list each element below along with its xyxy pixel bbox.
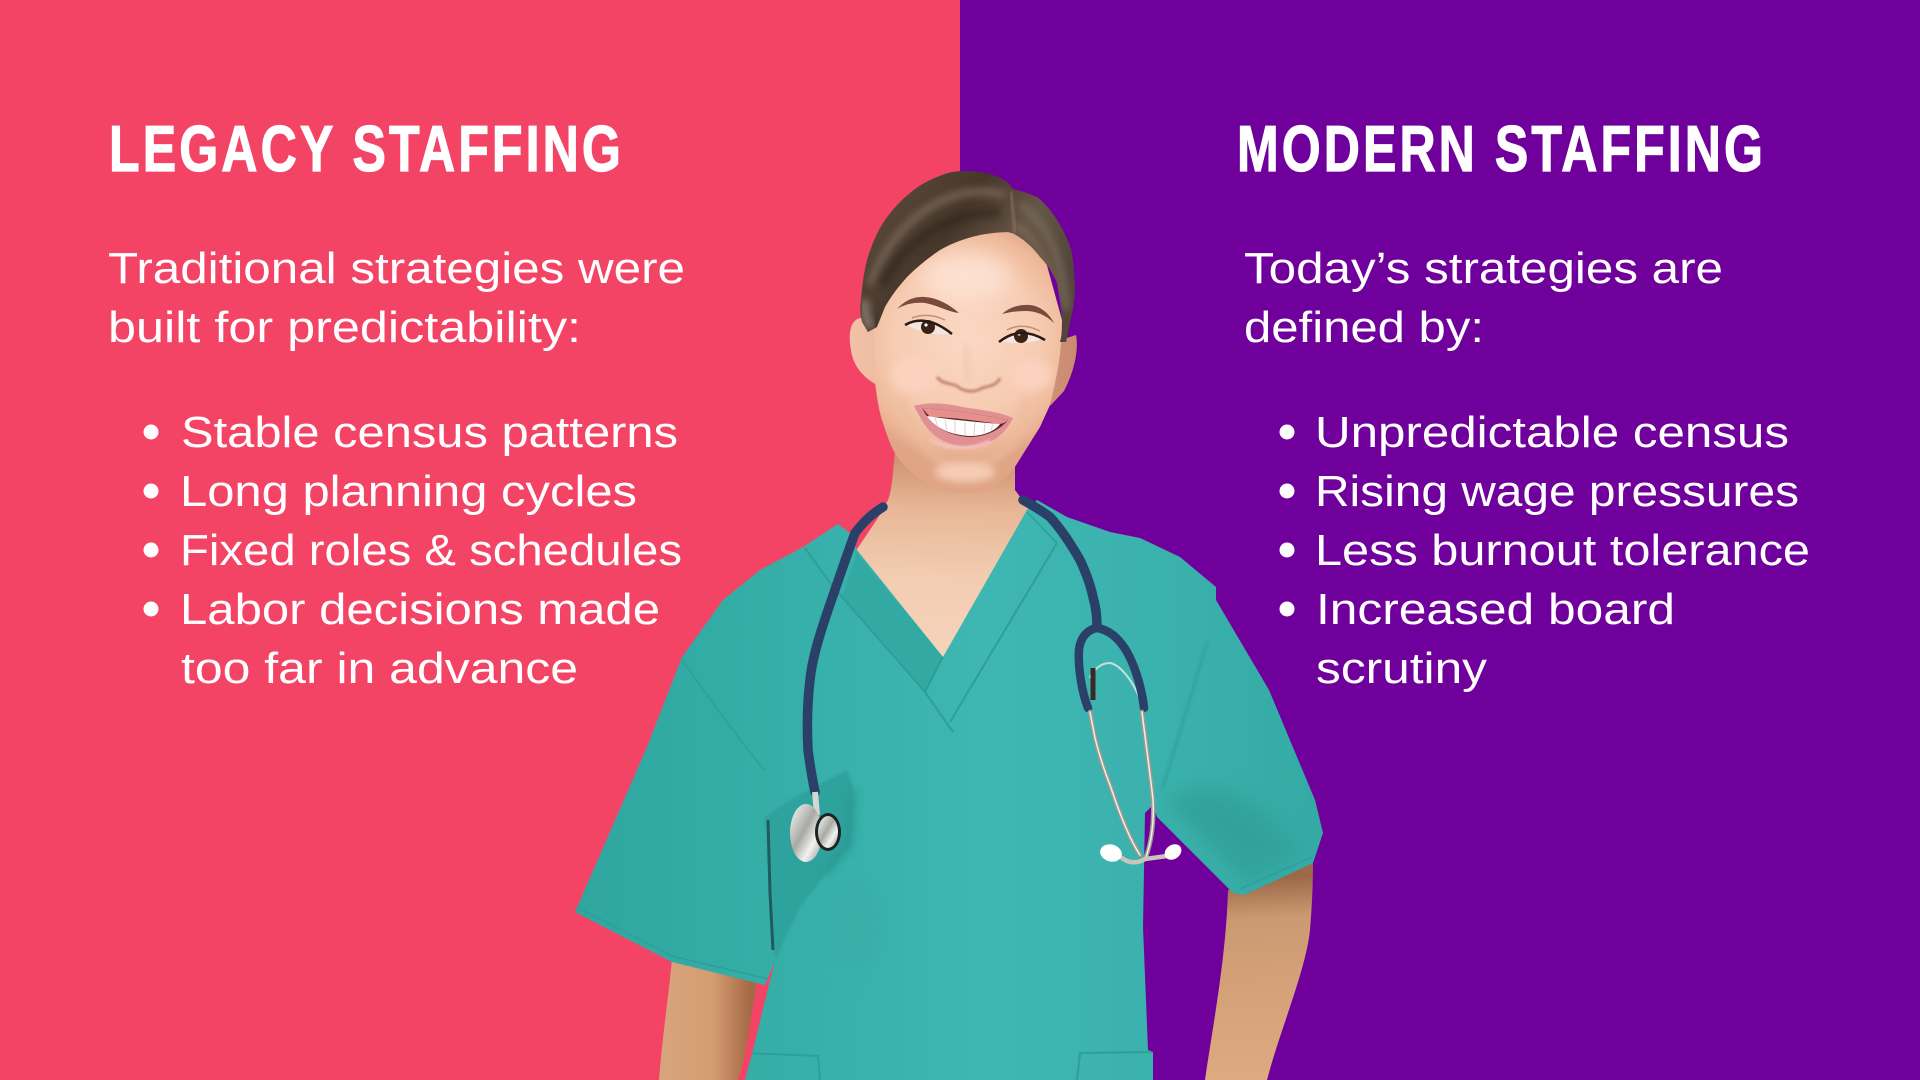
scrub top: [575, 500, 1323, 1080]
panel: legacy staffing background: [0, 0, 960, 1080]
text block: legacy intro: [108, 244, 685, 352]
text block: legacy intro: Traditional strategies were: [108, 244, 685, 293]
nose: [937, 377, 1000, 391]
bullet list: legacy: Long planning cycles: [180, 467, 637, 516]
collar panels: [842, 553, 943, 692]
mouth: [914, 403, 1013, 448]
left tube: [807, 507, 883, 792]
face shading: [891, 253, 1052, 482]
bullet list: legacy: too far in advance: [181, 644, 578, 693]
eyes: [905, 315, 1045, 343]
head: [850, 171, 1077, 493]
chest piece: [790, 792, 841, 862]
bullet list: modern: Increased board: [1316, 585, 1675, 634]
pocket and metal loop backing: [1090, 663, 1140, 700]
right tube: [1023, 500, 1097, 627]
heading: modern staffing: MODERN STAFFING: [1237, 112, 1766, 185]
panel: modern staffing content: [1237, 112, 1810, 693]
heading: legacy staffing: LEGACY STAFFING: [109, 112, 624, 185]
pockets: [745, 1052, 1153, 1080]
ear tips: [1098, 842, 1124, 864]
bullet list: legacy: Stable census patterns: [181, 408, 678, 457]
metal tubes: [1090, 712, 1140, 855]
hair: [860, 171, 1075, 342]
bullet list: modern: Less burnout tolerance: [1315, 526, 1810, 575]
eyebrows: [897, 297, 1054, 323]
bullet list: legacy: Labor decisions made: [180, 585, 660, 634]
face: [873, 220, 1062, 493]
illustration: smiling nurse in teal scrubs: [575, 171, 1323, 1080]
arms: [659, 860, 1313, 1080]
text block: modern intro: Today’s strategies are: [1244, 244, 1723, 293]
bullet list: modern: scrutiny: [1316, 644, 1487, 693]
bullet list: legacy: Fixed roles & schedules: [180, 526, 682, 575]
text block: modern intro: [1244, 244, 1723, 352]
stethoscope: [790, 500, 1184, 864]
bullet list: modern: Unpredictable census: [1315, 408, 1789, 457]
bullet list: modern: [1280, 408, 1810, 693]
ears: [850, 318, 1077, 406]
bullet list: modern: Rising wage pressures: [1315, 467, 1799, 516]
text block: modern intro: defined by:: [1244, 303, 1484, 352]
neck: [855, 450, 1030, 660]
bullet list: legacy: [144, 408, 682, 693]
text block: legacy intro: built for predictability:: [108, 303, 581, 352]
panel: legacy staffing content: [108, 112, 685, 693]
panel: modern staffing background: [960, 0, 1920, 1080]
